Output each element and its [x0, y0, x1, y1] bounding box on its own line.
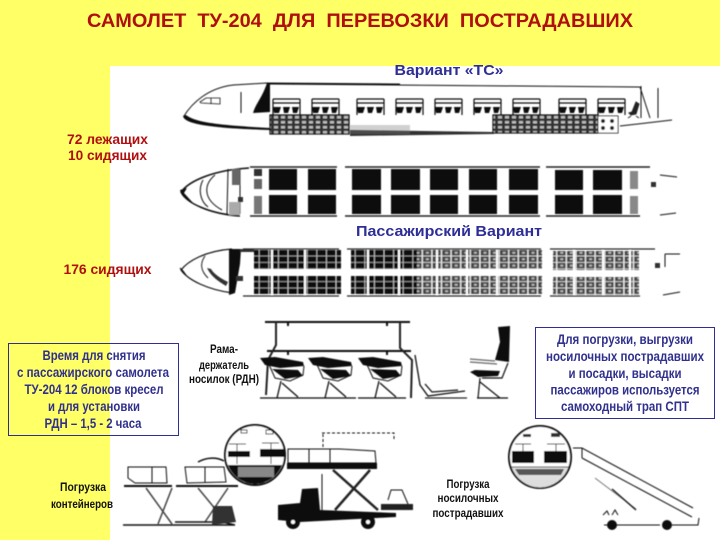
label: stretcher frame: носилок (РДН): [189, 372, 259, 386]
label: stretcher casualty loading: [432, 477, 504, 520]
label: container loading: Погрузка: [60, 480, 106, 494]
seats with stretcher frame: [260, 322, 510, 398]
callout: SPT self-propelled ramp: самоходный трап СПТ: [561, 399, 690, 414]
label: 72 lying, 10 seated: 10 сидящих: [68, 147, 147, 163]
label: container loading: [51, 480, 113, 511]
containers on scissor lift: [128, 467, 226, 483]
heading: passenger variant: Пассажирский Вариант: [356, 223, 542, 240]
label: stretcher casualty loading: Погрузка: [446, 477, 490, 491]
litter blocks: [269, 169, 622, 214]
wall lines: [250, 167, 650, 216]
containers on truck: [288, 449, 376, 463]
scissor lift: [333, 470, 378, 510]
footrest: [415, 355, 465, 396]
callout: SPT self-propelled ramp: Для погрузки, выгрузки: [557, 332, 693, 347]
side view of TS variant aircraft: [183, 83, 672, 136]
seat aisle gaps: [272, 250, 630, 295]
fuselage outline: [184, 83, 650, 118]
label: stretcher frame: держатель: [199, 358, 249, 372]
illustration: container loader truck: [123, 425, 413, 529]
vehicle trailer: [388, 490, 408, 504]
seat blocks: [254, 250, 341, 269]
callout: SPT self-propelled ramp: и посадки, высадки: [568, 366, 682, 381]
callout: seat removal time: ТУ-204 12 блоков кресел: [24, 382, 164, 397]
stretcher frame (RDN): [265, 322, 411, 351]
label: 176 seated: 176 сидящих: [64, 261, 152, 277]
label: stretcher frame: Рама-: [210, 342, 238, 356]
callout: seat removal time: и для установки: [48, 399, 140, 414]
callout: seat removal time: с пассажирского самолета: [17, 365, 169, 380]
title: САМОЛЕТ ТУ-204 ДЛЯ ПЕРЕВОЗКИ ПОСТРАДАВШИХ: [87, 10, 633, 32]
heading: TS variant: Вариант «ТС»: [394, 62, 504, 79]
label: stretcher casualty loading: носилочных: [438, 491, 499, 505]
plan view of passenger aircraft: [180, 249, 680, 296]
cargo holds: [270, 115, 349, 134]
callout: seat removal time: Время для снятия: [42, 348, 146, 363]
label: 72 lying, 10 seated: [67, 131, 148, 163]
label: 72 lying, 10 seated: 72 лежащих: [67, 131, 148, 147]
label: stretcher casualty loading: пострадавших: [432, 506, 504, 520]
truck cab and wheels: [278, 488, 396, 522]
illustration: self-propelled ramp: [509, 426, 699, 530]
reclined seats: [260, 357, 308, 398]
callout: seat removal time: РДН – 1,5 - 2 часа: [44, 416, 142, 431]
callout: seat removal time: [8, 344, 178, 436]
aft seat: [628, 102, 639, 118]
callout: SPT self-propelled ramp: [536, 328, 714, 418]
white drawing area: [110, 66, 720, 540]
plan view of TS variant aircraft: [180, 167, 677, 216]
label: container loading: контейнеров: [51, 497, 113, 511]
upright seat: [495, 326, 510, 362]
label: stretcher frame: [189, 342, 259, 386]
aircraft cross-section: [225, 425, 285, 485]
stretcher rows: [273, 99, 300, 115]
